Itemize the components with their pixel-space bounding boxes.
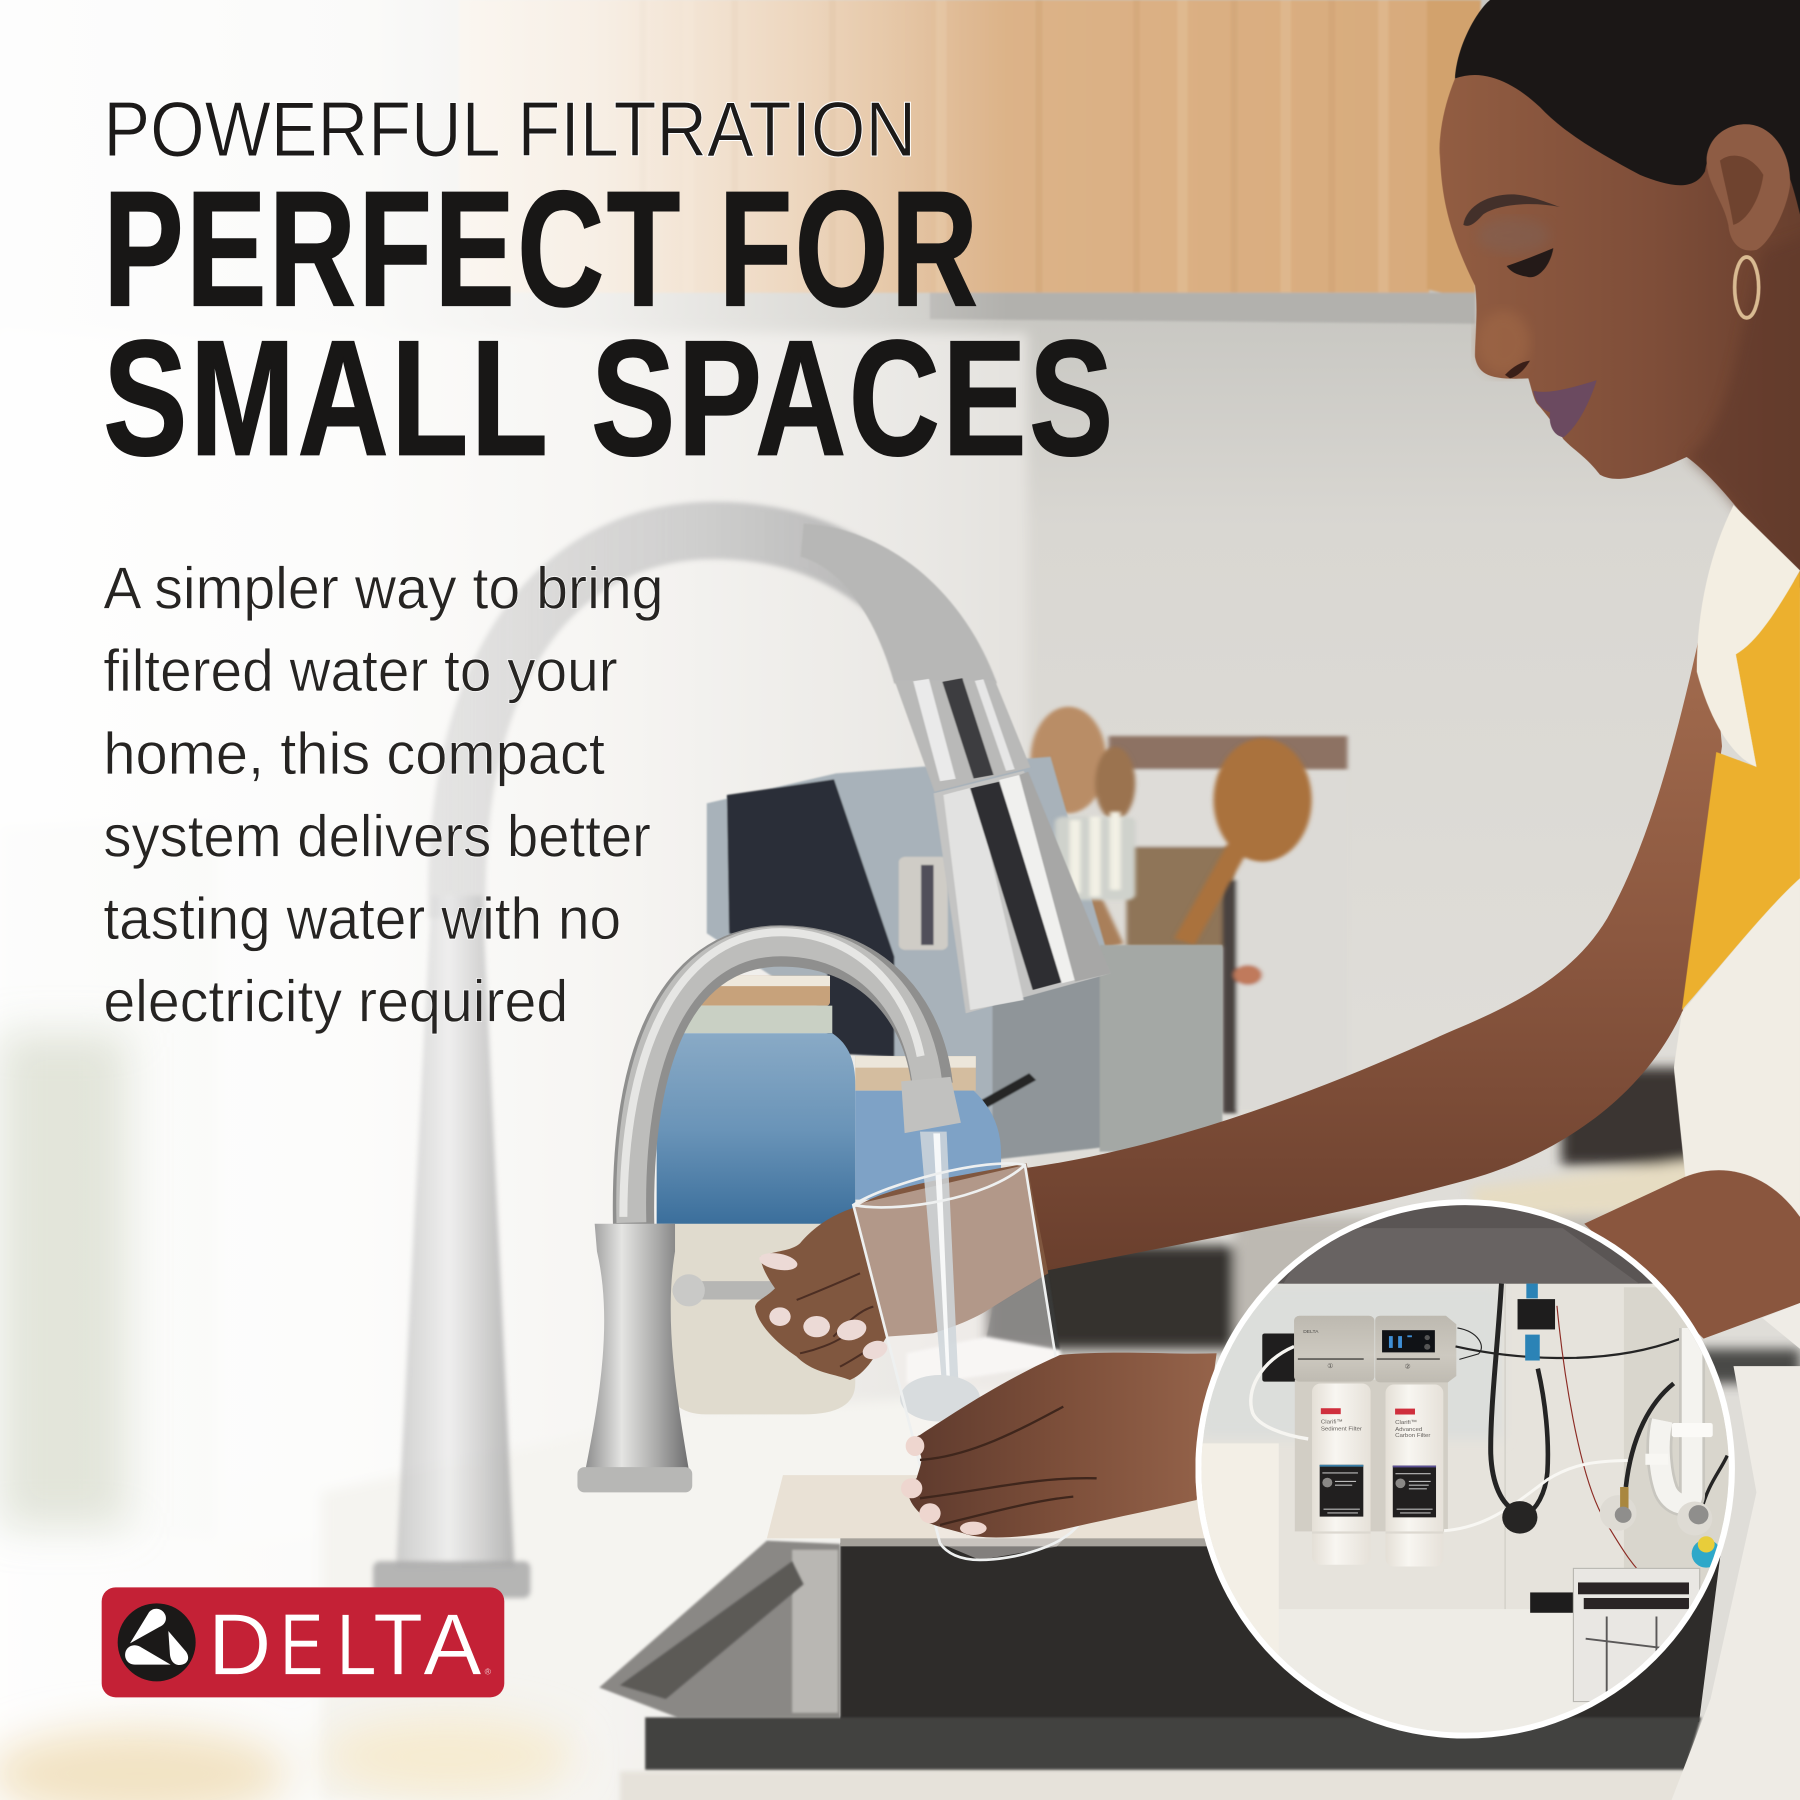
white utensil panel and frame [1109, 736, 1347, 1113]
black info label [1320, 1465, 1363, 1517]
white drain pipe [1645, 1328, 1713, 1504]
headline: powerful filtration: POWERFUL FILTRATION [103, 85, 916, 173]
hands, glass and water [755, 1132, 1217, 1560]
inset circle: under-sink filter system [1195, 1199, 1739, 1742]
finger creases [797, 1273, 880, 1367]
fingernails upper hand [758, 1250, 890, 1362]
white outlet tube [1444, 1460, 1628, 1531]
control unit 2 [1375, 1316, 1456, 1382]
colourful brush [1692, 1536, 1721, 1568]
cabinet floor [1278, 1610, 1588, 1732]
body copy: filtered water to your [103, 637, 618, 704]
blurred pull-down faucet arc and stem [373, 530, 990, 1598]
unit brand: DELTA [1303, 1329, 1319, 1335]
shadow behind filters [1295, 1380, 1448, 1531]
eye [1507, 248, 1553, 277]
pull-down faucet neck and spray head [894, 680, 1111, 1013]
back of hand on faucet handle [755, 1163, 1048, 1380]
body copy [103, 554, 664, 1035]
wood upper cabinet [459, 0, 1481, 324]
registered mark: ® [485, 1666, 492, 1676]
stove, utensil holder and pull-down faucet head [707, 523, 1347, 1160]
logo mark [118, 1603, 196, 1681]
filter name: Sediment Filter [1321, 1426, 1362, 1432]
red brand label [1395, 1409, 1415, 1415]
body copy: system delivers better [103, 802, 651, 869]
headline: small spaces: SMALL SPACES [103, 306, 1116, 490]
neck shadow [1687, 214, 1800, 628]
black bracket [1262, 1334, 1297, 1382]
digital display [1382, 1330, 1435, 1352]
left curtain and foreground counter [0, 827, 1091, 1800]
filter name [1395, 1420, 1430, 1437]
white bowl seen through glass [907, 1337, 1063, 1383]
filter name: Clarifi™ [1321, 1418, 1343, 1425]
inset photo content [1195, 1202, 1739, 1742]
body copy: tasting water with no [103, 885, 621, 952]
cabinet wall [1195, 1280, 1739, 1613]
counter [321, 1378, 1217, 1800]
hand holding glass [908, 1353, 1217, 1538]
filter name: Advanced [1395, 1427, 1422, 1433]
white ring [1195, 1199, 1735, 1739]
woman's forearm and shoulder [1022, 597, 1722, 1272]
faucet arc joining the neck [801, 523, 997, 683]
logo wordmark: L [336, 1595, 377, 1693]
chrome handle [899, 857, 948, 950]
body copy: home, this compact [103, 720, 605, 787]
text block [103, 85, 1116, 1035]
lips [1533, 380, 1597, 437]
wooden spoons [1030, 707, 1312, 947]
water in glass [900, 1375, 980, 1422]
filter name: Clarifi™ [1395, 1419, 1417, 1426]
black info label [1393, 1466, 1436, 1517]
nostril [1505, 361, 1530, 378]
cream base of jar [657, 1224, 855, 1414]
inlet tube [1251, 1346, 1308, 1439]
wall seam [1505, 1284, 1506, 1609]
glass outline [853, 1163, 1082, 1560]
finger separations [920, 1407, 1097, 1525]
hair [1455, 0, 1800, 228]
woman's second arm [1584, 1170, 1800, 1339]
water stream [920, 1132, 958, 1380]
white towel and counter right [1671, 1366, 1800, 1800]
left pale backsplash [0, 333, 1027, 1481]
sediment filter cartridge [1312, 1383, 1371, 1565]
foreground scene: jars, counter, sink [577, 597, 1800, 1800]
black hoses [1456, 1284, 1727, 1515]
left cabinet side [1202, 1444, 1278, 1609]
stove seen through glass [987, 1273, 1060, 1350]
warm blur lower left [0, 1033, 574, 1800]
red brand label [1321, 1408, 1341, 1414]
shutoff valves [1600, 1487, 1712, 1535]
body copy: A simpler way to bring [103, 554, 664, 621]
sink [599, 1538, 1800, 1800]
right side background counter [987, 1068, 1800, 1383]
filter name: Carbon Filter [1395, 1433, 1430, 1439]
unit number: ② [1405, 1363, 1411, 1371]
body copy: electricity required [103, 968, 568, 1035]
carbon filter cartridge [1386, 1385, 1443, 1567]
logo wordmark: E [280, 1595, 323, 1693]
red wire [1557, 1306, 1655, 1585]
blue and black connector [1518, 1284, 1555, 1361]
ear [1707, 124, 1790, 251]
headline: perfect for: PERFECT FOR [103, 156, 980, 340]
filter name [1321, 1419, 1362, 1430]
small faucet [577, 932, 961, 1492]
blue ceramic jars [657, 976, 1001, 1414]
nose highlight [1477, 311, 1530, 375]
white dress corner under arm [1762, 1303, 1800, 1349]
logo wordmark: T [373, 1595, 423, 1693]
face and neck [1440, 54, 1800, 628]
glass body [853, 1165, 1082, 1560]
logo wordmark [208, 1595, 482, 1693]
counter ledge [767, 1475, 1217, 1538]
fingernails lower hand [901, 1436, 987, 1535]
unit number: ① [1327, 1362, 1333, 1370]
black valve [1502, 1501, 1537, 1534]
hoop earring [1735, 257, 1759, 318]
logo wordmark: D [208, 1595, 271, 1693]
control unit 1 [1294, 1316, 1374, 1382]
logo wordmark: A [423, 1595, 482, 1693]
shelf above [1277, 1205, 1653, 1284]
dark flap [727, 779, 894, 1057]
storage bin with towel [1530, 1568, 1700, 1702]
eyeshadow [1477, 218, 1550, 253]
eyebrow [1463, 194, 1560, 226]
ribbed jar behind faucet [1055, 812, 1135, 900]
stove body [707, 757, 1222, 1160]
woman's clothing [1674, 505, 1800, 1217]
Delta logo [102, 1587, 504, 1697]
woman's head, face and hair [1440, 0, 1800, 628]
